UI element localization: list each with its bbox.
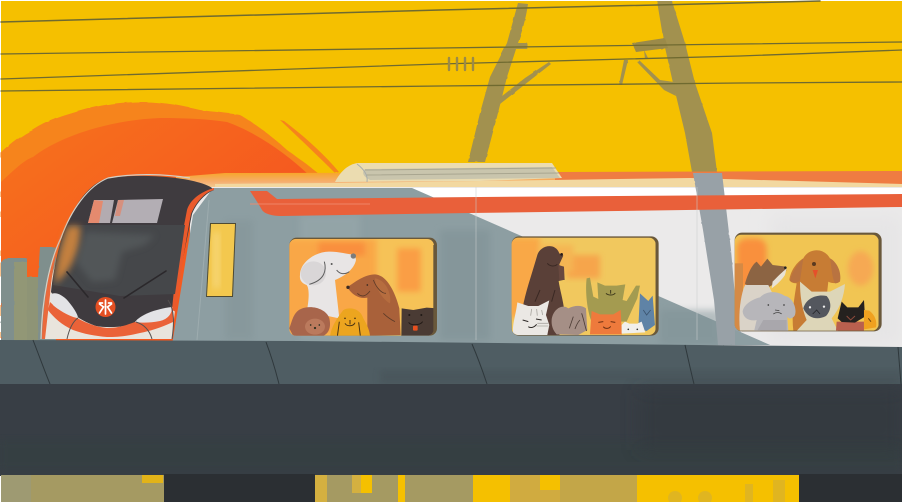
shaded body grey <box>172 188 770 345</box>
distant buildings at left <box>1 247 56 345</box>
window 3 with dogs and cats <box>735 233 882 332</box>
roof band <box>176 171 902 190</box>
right pole <box>619 1 717 172</box>
cab outline <box>41 175 190 339</box>
viaduct <box>0 340 902 476</box>
dog: grey floppy-eared <box>743 292 796 332</box>
cat: orange <box>590 310 622 334</box>
coupler lines <box>67 300 173 339</box>
red band <box>48 302 173 337</box>
city silhouette centre <box>315 475 799 502</box>
dog: brown dachshund <box>346 274 401 336</box>
train <box>41 163 902 347</box>
left pole <box>468 3 551 162</box>
overhead wires and poles <box>1 1 902 172</box>
pillar left <box>164 474 315 502</box>
window 2 with cats and dog <box>507 236 659 336</box>
cat: olive with raised paws <box>586 278 640 322</box>
ground under viaduct <box>1 474 902 502</box>
dog: brown and white sheltie <box>739 259 787 332</box>
destination signs <box>88 199 163 223</box>
cab front <box>41 175 214 339</box>
dog: black puppy <box>401 308 437 336</box>
window frame <box>289 238 437 336</box>
dog: taupe <box>552 306 587 335</box>
red stripe <box>250 191 902 216</box>
window frame <box>735 233 882 331</box>
viaduct parapet <box>0 340 902 385</box>
roof pantograph housing <box>335 163 562 182</box>
dog: yellow puppy <box>330 308 370 338</box>
catenary wires <box>1 1 902 91</box>
train body white <box>190 187 902 347</box>
dog: tan spaniel <box>789 250 840 331</box>
wipers <box>67 271 166 298</box>
wire insulators <box>449 58 473 70</box>
cat: siamese <box>796 282 845 332</box>
cab nose cream <box>43 262 176 339</box>
dog: red-brown pomeranian <box>289 307 330 338</box>
shadow over lower corner of window 3 <box>735 330 770 345</box>
window 1 with dogs <box>283 238 437 338</box>
cab dark mask <box>51 176 214 327</box>
cab side red edge <box>172 188 214 312</box>
dog: dark brown spaniel <box>523 246 565 336</box>
cat: blue-grey <box>638 293 655 331</box>
pole shadow on body <box>693 173 745 345</box>
cat: small orange <box>864 310 876 329</box>
setting sun <box>1 102 339 345</box>
logo badge <box>96 297 116 317</box>
headlights <box>50 293 78 317</box>
window frame <box>512 236 659 336</box>
viaduct girder <box>0 384 902 476</box>
cat: black and pink <box>836 300 865 331</box>
door window <box>206 223 236 297</box>
city silhouette left <box>1 475 164 502</box>
cat: small white <box>622 322 645 334</box>
parapet joints <box>33 340 901 384</box>
left red edge <box>42 230 64 339</box>
windscreen <box>53 225 185 296</box>
car joints <box>476 187 697 340</box>
pillar right <box>799 474 902 502</box>
dog: white poodle <box>300 252 356 318</box>
cat: white tabby <box>513 300 549 335</box>
